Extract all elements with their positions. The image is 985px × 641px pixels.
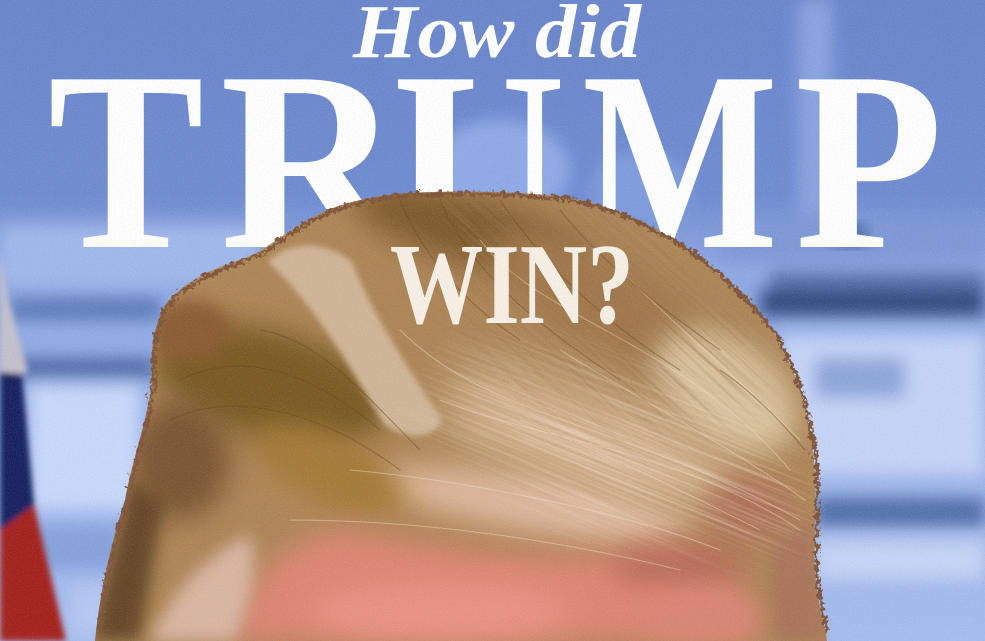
heading: TRUMP: U (392, 20, 566, 303)
streak texture (426, 202, 815, 564)
heading: TRUMP: T (48, 20, 204, 303)
heading: TRUMP: R (220, 20, 405, 303)
forehead (230, 530, 760, 641)
right temple (705, 478, 795, 542)
heading: TRUMP: M (582, 20, 778, 303)
left pale sideburn hair (150, 535, 253, 641)
upper hair tones (348, 192, 581, 281)
heading: TRUMP (48, 20, 943, 303)
hair and forehead (95, 188, 830, 641)
heading: TRUMP: P (795, 20, 943, 303)
flag at left edge (0, 250, 66, 641)
hair strands (170, 200, 805, 570)
blond right side (639, 313, 808, 464)
ragged hair outline (98, 192, 825, 630)
heading: WIN?: WIN? (390, 221, 634, 348)
dark left hair (150, 306, 393, 453)
pale hair sweep (268, 246, 442, 436)
